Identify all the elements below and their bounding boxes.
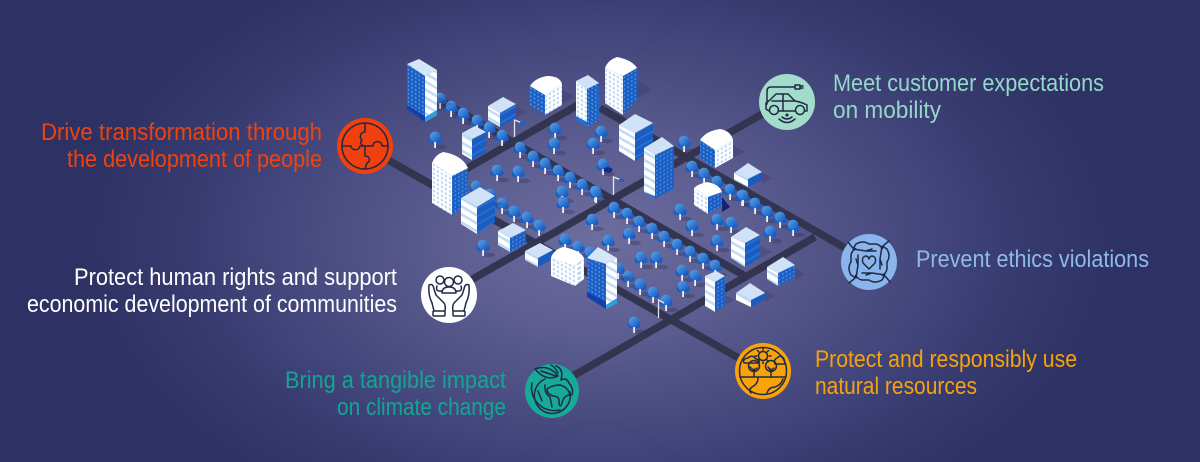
building: central striped block bbox=[619, 114, 653, 161]
label: human rights bbox=[27, 264, 397, 318]
city: trees, lamps and buildings bbox=[407, 57, 805, 334]
label: climate change: on climate change bbox=[337, 394, 506, 421]
tree groups bbox=[428, 93, 805, 334]
icon: hands and heart on blue circle bbox=[841, 234, 897, 290]
label: ethics violations: Prevent ethics violations bbox=[916, 246, 1149, 273]
building: large west curved tower bbox=[432, 152, 468, 215]
roads bbox=[365, 97, 868, 388]
label: drive transformation: Drive transformation through bbox=[41, 119, 322, 146]
icon: puzzle on red circle bbox=[337, 118, 393, 174]
building: east low block bbox=[734, 163, 762, 187]
building: small west tower bbox=[462, 126, 486, 160]
icon: electric car on mint circle bbox=[759, 74, 815, 130]
building: low block bbox=[525, 243, 553, 267]
building: south-east low block bbox=[736, 283, 765, 307]
lamp posts bbox=[514, 120, 664, 318]
label: natural resources bbox=[815, 346, 1077, 400]
building: south curved block bbox=[551, 247, 584, 286]
lamp heads and parked car bbox=[520, 122, 624, 182]
label: drive transformation bbox=[41, 119, 322, 173]
label: natural resources: Protect and responsibly use bbox=[815, 346, 1077, 373]
building: small office bbox=[488, 97, 516, 127]
icon: hands and people on white circle bbox=[421, 267, 477, 323]
label: human rights: Protect human rights and support bbox=[74, 264, 397, 291]
building: striped block bbox=[461, 187, 495, 234]
label: drive transformation: the development of people bbox=[67, 146, 322, 173]
building: top-left tower bbox=[407, 59, 437, 122]
label: human rights: economic development of communities bbox=[27, 291, 397, 318]
building: east striped block bbox=[731, 227, 760, 267]
building shadows bbox=[437, 80, 805, 305]
building: curved block bbox=[530, 76, 562, 115]
label: customer expectations: on mobility bbox=[833, 97, 941, 124]
building: north-east curved block bbox=[700, 129, 733, 168]
building: central tower bbox=[644, 137, 674, 199]
icon: globe and leaf on teal circle bbox=[525, 364, 579, 418]
icon: nature on orange circle bbox=[735, 343, 791, 399]
building: far east office bbox=[767, 257, 795, 286]
label: customer expectations: Meet customer expectations bbox=[833, 70, 1104, 97]
label: climate change: Bring a tangible impact bbox=[285, 367, 506, 394]
building: east curved block bbox=[694, 182, 722, 214]
label: customer expectations bbox=[833, 70, 1104, 124]
label: climate change bbox=[285, 367, 506, 421]
label: natural resources: natural resources bbox=[815, 373, 977, 400]
building: low office west bbox=[498, 223, 526, 252]
building: tall curved tower bbox=[605, 57, 637, 115]
building: south-east tower bbox=[705, 271, 725, 312]
building: south tall tower bbox=[587, 247, 617, 309]
building: north tower bbox=[576, 75, 599, 127]
